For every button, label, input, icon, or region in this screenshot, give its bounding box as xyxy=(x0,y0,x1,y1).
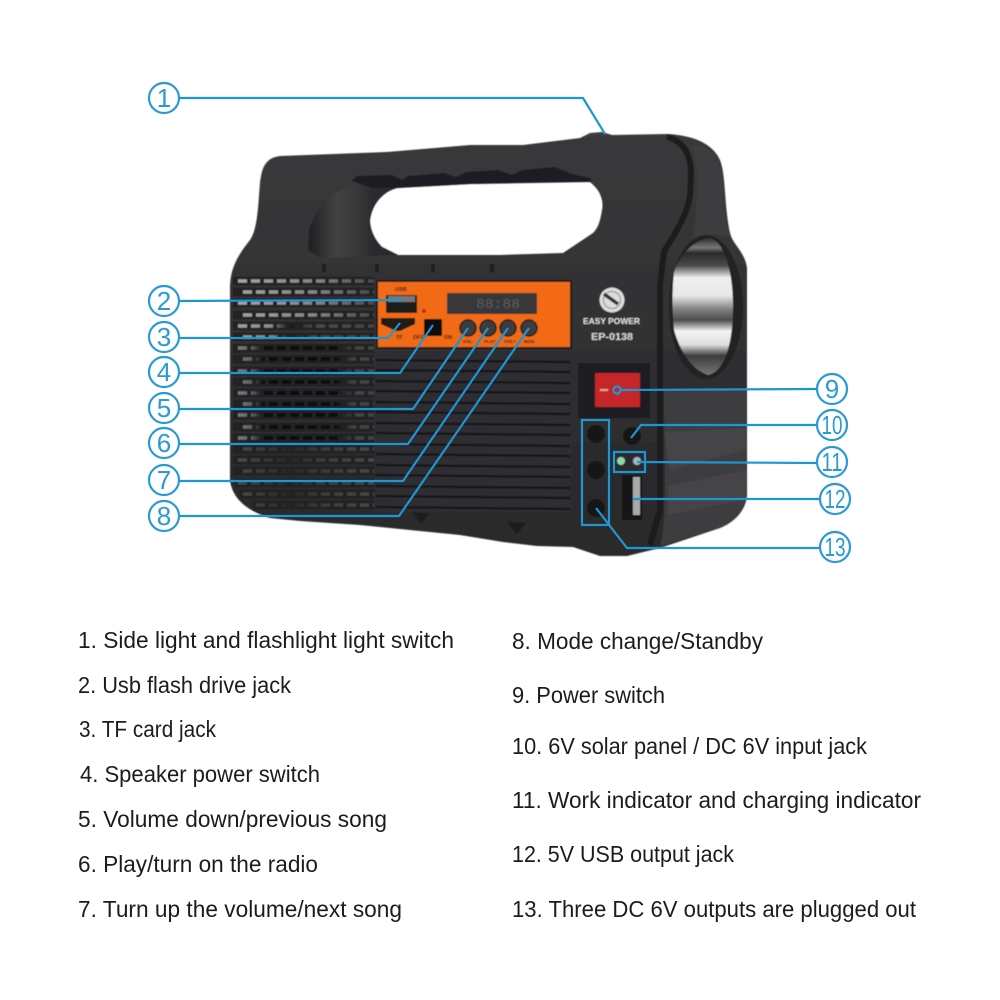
callout 8: 8 xyxy=(157,501,171,531)
lcd display xyxy=(447,293,537,314)
legend column: items 1 to 7: 2. Usb flash drive jack xyxy=(78,672,291,698)
panel top pegs xyxy=(322,264,494,272)
brand logo and model: EP-0138 xyxy=(591,331,633,343)
flashlight bezel xyxy=(669,235,743,379)
legend column: items 1 to 7: 3. TF card jack xyxy=(79,716,216,742)
indicator leds xyxy=(617,457,641,465)
handle inner recess shading xyxy=(308,178,400,258)
speaker power switch xyxy=(413,319,452,341)
speaker power switch: OFF xyxy=(413,335,425,341)
callout 10 xyxy=(631,410,847,440)
side shell highlight facets xyxy=(664,428,746,515)
control buttons: MOD xyxy=(524,339,535,344)
callout 2 xyxy=(149,286,402,316)
brand logo and model: EASY POWER xyxy=(583,316,640,326)
callout 9: 9 xyxy=(825,374,839,404)
usb flash drive port: USB xyxy=(395,287,407,293)
legend column: items 8 to 13: 9. Power switch xyxy=(512,682,665,708)
callout 8 xyxy=(149,328,529,531)
indicator dot xyxy=(422,309,426,313)
control buttons xyxy=(460,320,537,344)
callout 13: 13 xyxy=(824,532,846,562)
legend column: items 8 to 13: 13. Three DC 6V outputs are plugged out xyxy=(512,896,917,922)
grille rows xyxy=(233,281,374,505)
tf card slot xyxy=(381,318,415,341)
callout 3 xyxy=(149,322,400,352)
handle grips xyxy=(352,167,592,188)
dc input jack xyxy=(623,427,641,445)
legend column: items 1 to 7 xyxy=(78,627,454,922)
callout 12 xyxy=(633,484,850,514)
callout 2: 2 xyxy=(157,286,171,316)
brand logo and model xyxy=(583,288,640,343)
power rocker switch xyxy=(578,363,650,418)
callout 13 xyxy=(582,420,850,562)
callout 6: 6 xyxy=(157,428,171,458)
legend column: items 1 to 7: 7. Turn up the volume/next song xyxy=(78,896,402,922)
legend column: items 8 to 13 xyxy=(512,628,921,922)
legend column: items 8 to 13: 11. Work indicator and charging indicator xyxy=(512,787,921,813)
callout 11: 11 xyxy=(822,447,842,477)
flashlight reflector xyxy=(672,238,733,375)
callout 10: 10 xyxy=(822,410,842,440)
callout 5: 5 xyxy=(157,393,171,423)
legend column: items 1 to 7: 1. Side light and flashlight light switch xyxy=(78,627,454,653)
legend column: items 1 to 7: 5. Volume down/previous song xyxy=(78,806,387,832)
control buttons: VOL+ xyxy=(504,339,516,344)
grille dashes xyxy=(238,281,374,505)
speaker power switch: ON xyxy=(444,335,452,341)
right side shell xyxy=(660,145,746,546)
dc output jacks xyxy=(587,425,605,517)
usb output port xyxy=(622,475,642,520)
lcd display: 88:88 xyxy=(476,297,520,313)
orange control panel xyxy=(376,280,572,349)
legend column: items 8 to 13: 8. Mode change/Standby xyxy=(512,628,763,654)
callout 12: 12 xyxy=(824,484,846,514)
radio body silhouette with handle xyxy=(230,132,747,556)
callout 1 xyxy=(149,83,605,134)
usb flash drive port xyxy=(386,287,417,313)
foot triangles xyxy=(412,512,526,534)
callout 1: 1 xyxy=(157,83,171,113)
legend column: items 8 to 13: 10. 6V solar panel / DC 6V input jack xyxy=(512,733,867,759)
speaker grille xyxy=(233,281,374,505)
callout 6 xyxy=(149,328,488,458)
legend column: items 1 to 7: 6. Play/turn on the radio xyxy=(78,851,318,877)
lower slatted panel xyxy=(375,352,571,512)
control buttons: VOL- xyxy=(463,339,474,344)
callout 9 xyxy=(613,374,847,404)
callout 3: 3 xyxy=(157,322,171,352)
callout 4: 4 xyxy=(157,357,171,387)
legend column: items 8 to 13: 12. 5V USB output jack xyxy=(512,841,734,867)
control buttons: PLAY xyxy=(484,339,496,344)
callout 5 xyxy=(149,328,468,423)
legend column: items 1 to 7: 4. Speaker power switch xyxy=(80,761,320,787)
callout 7: 7 xyxy=(157,465,171,495)
callout 11 xyxy=(614,447,847,477)
right handle cap groove xyxy=(650,137,691,545)
tf card slot: TF xyxy=(396,335,403,341)
radio product illustration xyxy=(230,132,747,556)
callout 7 xyxy=(149,328,508,495)
callout 4 xyxy=(149,325,433,387)
